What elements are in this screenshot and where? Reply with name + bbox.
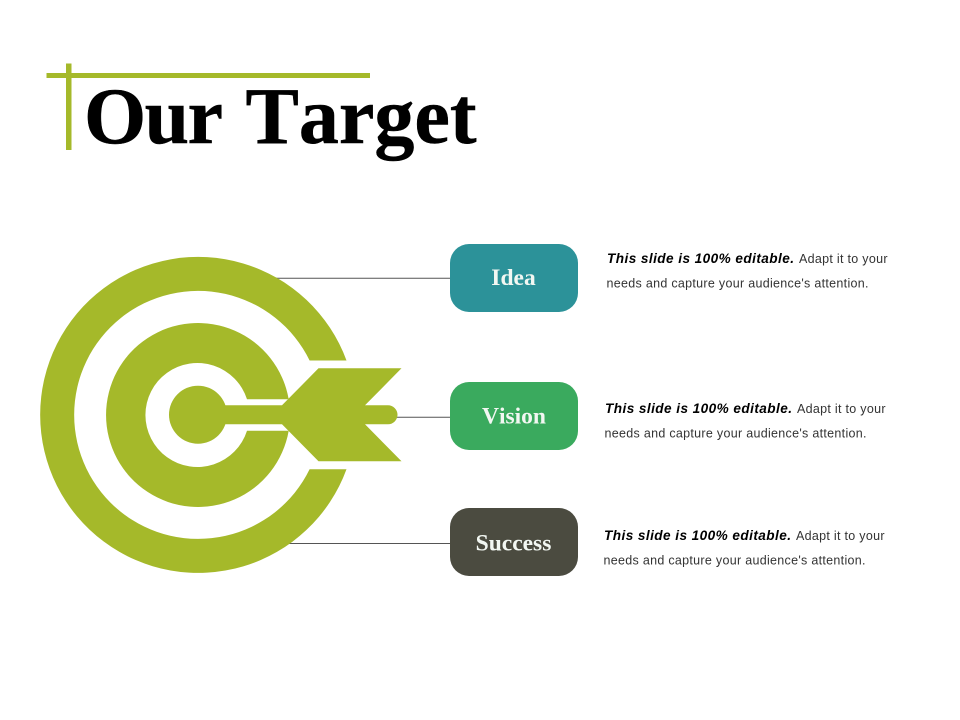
text block: idea: This slide is 100% editable.	[607, 251, 794, 266]
icon: target with arrow	[40, 257, 402, 573]
bullseye	[169, 386, 227, 444]
text block: idea: needs and capture your audience's attention.	[606, 276, 868, 290]
text block: vision: needs and capture your audience's attention.	[604, 426, 866, 440]
title: Our	[84, 73, 223, 161]
pill: success: Success	[476, 530, 551, 556]
text block: vision: This slide is 100% editable.	[605, 401, 792, 416]
connector: vision	[394, 416, 451, 418]
text block: success	[604, 528, 884, 568]
text block: success: Adapt it to your	[796, 529, 884, 543]
title: Target	[246, 73, 477, 161]
text block: vision	[604, 401, 886, 440]
pill: idea	[450, 244, 578, 312]
text block: idea: Adapt it to your	[799, 252, 888, 266]
title accent bars	[46, 64, 370, 150]
pill: vision: Vision	[482, 404, 546, 430]
connector: success	[288, 542, 451, 544]
text block: success: This slide is 100% editable.	[604, 528, 791, 543]
text block: idea	[606, 251, 888, 290]
arrow	[220, 368, 402, 461]
pill: vision	[450, 382, 578, 450]
pill: success	[450, 508, 578, 576]
text block: success: needs and capture your audience's attention.	[604, 554, 866, 568]
outer ring	[40, 257, 347, 573]
middle ring	[106, 323, 289, 507]
connector: idea	[276, 277, 451, 279]
text block: vision: Adapt it to your	[797, 402, 886, 416]
pill: idea: Idea	[491, 265, 536, 291]
